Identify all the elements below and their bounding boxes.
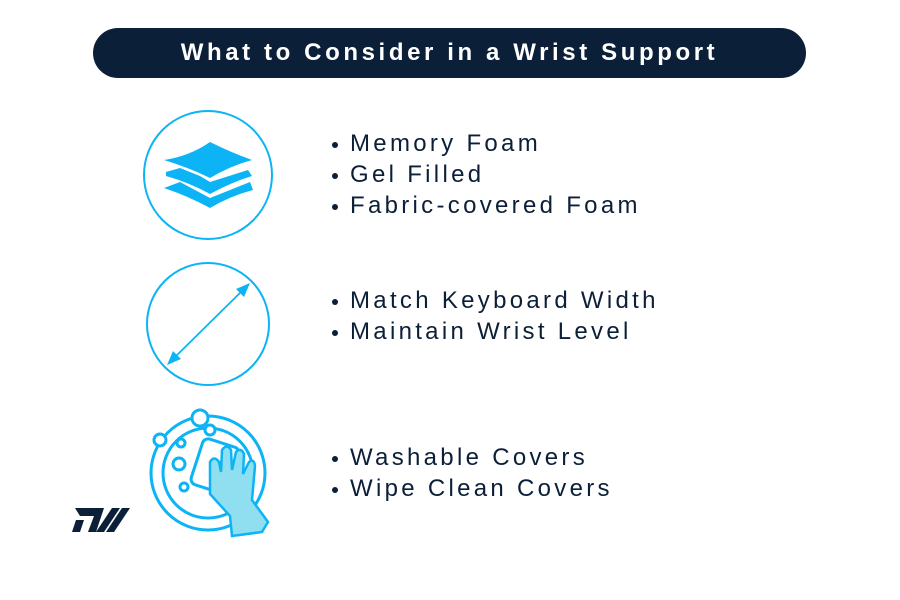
list: cleaning: Washable Covers bbox=[350, 444, 588, 471]
list: materials bbox=[332, 130, 641, 219]
icon: washing plate and glove bbox=[151, 410, 268, 536]
list: size bbox=[332, 287, 659, 345]
title bbox=[93, 28, 806, 78]
icon: foam layers bbox=[144, 111, 272, 239]
list: cleaning bbox=[332, 444, 613, 502]
list: materials: Memory Foam bbox=[350, 130, 541, 157]
list: size: Match Keyboard Width bbox=[350, 287, 659, 314]
list: cleaning: Wipe Clean Covers bbox=[350, 475, 613, 502]
list: size: Maintain Wrist Level bbox=[350, 318, 632, 345]
title: What to Consider in a Wrist Support bbox=[181, 39, 718, 66]
list: materials: Gel Filled bbox=[350, 161, 484, 188]
logo bbox=[72, 508, 130, 532]
icon: diagonal arrow bbox=[147, 263, 269, 385]
list: materials: Fabric-covered Foam bbox=[350, 192, 641, 219]
